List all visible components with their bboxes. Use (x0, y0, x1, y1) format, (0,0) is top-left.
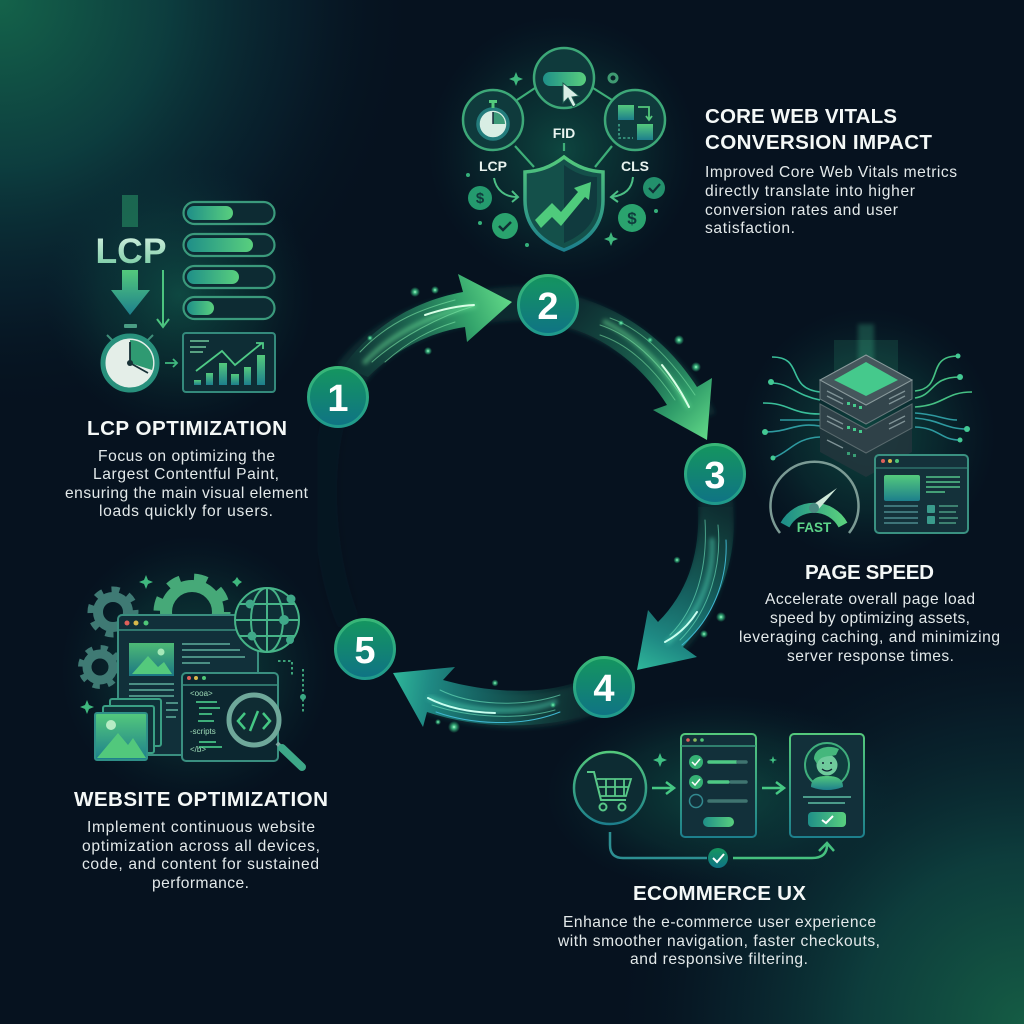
badge 2: 2 (537, 286, 559, 328)
text: ecommerce description: with smoother navigation, faster checkouts, (557, 933, 880, 950)
LCP stopwatch circle (463, 90, 523, 150)
arrows and coins (466, 72, 665, 247)
text: LCP description (65, 448, 309, 520)
text: LCP description: ensuring the main visual element (65, 485, 309, 502)
metric labels: LCP (479, 158, 507, 174)
heading: core web vitals conversion impact: CONVERSION IMPACT (705, 131, 932, 154)
text: website description: optimization across all devices, (82, 838, 320, 855)
browser window (875, 455, 968, 533)
heading: website optimization: WEBSITE OPTIMIZATION (74, 788, 328, 811)
arrows and coins: $ (627, 209, 637, 228)
dashed connector (278, 661, 303, 714)
sparkles (653, 753, 777, 767)
badge 3 (686, 444, 744, 504)
code window: </b> (190, 745, 206, 754)
icon: core web vitals shield (427, 15, 697, 285)
badge 3: 3 (704, 455, 726, 497)
text: website description: Implement continuous website (87, 819, 315, 836)
stopwatch (103, 324, 157, 390)
text: LCP description: Focus on optimizing the (98, 448, 275, 465)
heading: LCP optimization: LCP OPTIMIZATION (87, 417, 287, 440)
text: ecommerce description (557, 914, 880, 968)
text: ecommerce description: and responsive filtering. (630, 951, 808, 968)
cart circle (574, 752, 646, 824)
server stack (820, 324, 912, 477)
speed gauge (770, 462, 858, 535)
chart panel (183, 333, 275, 392)
CLS layout circle (605, 90, 665, 150)
metric labels: FID (553, 125, 575, 141)
text: core web vitals description: satisfaction. (705, 220, 795, 237)
arrow: step 4 to step 5 (393, 667, 580, 733)
arrow: step 3 to step 4 (637, 507, 734, 670)
badge 4: 4 (593, 668, 615, 710)
heading: core web vitals conversion impact: CORE WEB VITALS (705, 105, 897, 128)
sparkles (80, 575, 242, 714)
text: page speed description: server response times. (787, 648, 954, 665)
flow arrows (652, 782, 784, 794)
data wires (763, 356, 972, 458)
text: ecommerce description: Enhance the e-commerce user experience (563, 914, 876, 931)
progress bars (184, 202, 274, 319)
text: core web vitals description (705, 164, 957, 237)
shield (525, 157, 603, 250)
return path (610, 832, 834, 858)
text: core web vitals description: Improved Core Web Vitals metrics (705, 164, 957, 181)
cycle diagram (308, 274, 744, 733)
badge 2 (518, 276, 578, 334)
main browser window (118, 615, 258, 755)
LCP arrows: LCP (96, 232, 166, 271)
heading: page speed: PAGE SPEED (805, 561, 934, 584)
gears (81, 578, 226, 686)
text: page speed description (739, 591, 1000, 665)
code window (182, 673, 278, 761)
text: page speed description: leveraging caching, and minimizing (739, 629, 1000, 646)
arrow: step 1 to step 2 (343, 274, 512, 377)
badge 5: 5 (354, 630, 376, 672)
heading: ecommerce UX: ECOMMERCE UX (633, 882, 806, 905)
icon: page speed (740, 307, 996, 563)
image stack (95, 699, 161, 760)
magnifier (229, 695, 302, 767)
text: core web vitals description: directly translate into higher (705, 183, 915, 200)
badge 1 (308, 368, 368, 426)
faint ring bands (350, 303, 717, 712)
text: website description: code, and content for sustained (82, 856, 319, 873)
badge 4 (574, 658, 634, 716)
FID circle (534, 48, 594, 108)
text: page speed description: Accelerate overall page load (765, 591, 975, 608)
text: website description: performance. (152, 875, 249, 892)
badge 5 (336, 620, 394, 678)
arrow: step 2 to step 3 (570, 297, 712, 440)
code window: <ooa> (190, 689, 213, 698)
icon: website optimization (60, 535, 330, 805)
code window: -scripts (190, 727, 216, 736)
text: website description (82, 819, 320, 892)
text: LCP description: loads quickly for users. (99, 503, 273, 520)
icon: ecommerce UX (545, 695, 895, 895)
metric labels: CLS (621, 158, 649, 174)
arrows and coins: $ (476, 190, 485, 207)
text: page speed description: speed by optimizing assets, (770, 610, 970, 627)
text: LCP description: Largest Contentful Paint, (93, 466, 279, 483)
icon: LCP optimization (45, 160, 315, 430)
speed gauge: FAST (797, 520, 832, 535)
heading: core web vitals conversion impact (705, 105, 932, 154)
text: core web vitals description: conversion rates and user (705, 202, 898, 219)
checklist window (681, 734, 756, 837)
profile card (790, 734, 864, 837)
LCP arrows (96, 195, 169, 327)
globe (235, 588, 299, 652)
metric labels (479, 125, 649, 174)
badge 1: 1 (327, 378, 349, 420)
